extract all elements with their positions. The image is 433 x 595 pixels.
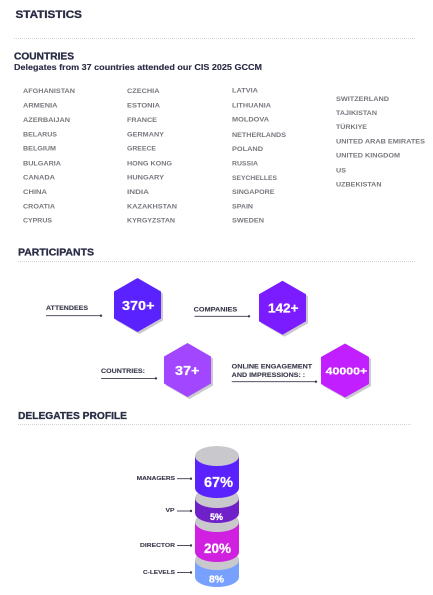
country column 1: ARMENIA (23, 102, 58, 110)
stat: companies: 142+ (268, 302, 298, 316)
stat: attendees: ATTENDEES (46, 305, 88, 312)
country column 4: UNITED KINGDOM (336, 153, 400, 160)
country column 3: SPAIN (232, 204, 253, 211)
segment: managers (137, 446, 239, 498)
country column 1: BULGARIA (23, 161, 61, 168)
stat: attendees (46, 278, 163, 334)
country column 2: INDIA (127, 189, 149, 196)
country column 3: LITHUANIA (232, 103, 271, 110)
country column 1: CHINA (23, 189, 47, 196)
segment: director: 20% (204, 541, 231, 556)
country column 3: MOLDOVA (232, 116, 269, 123)
country column 2: HONG KONG (127, 161, 172, 168)
stat: online engagement (232, 344, 371, 400)
country column 4 (336, 96, 426, 189)
segment: vp: VP (166, 508, 175, 514)
country column 2: HUNGARY (127, 175, 165, 182)
stat: online engagement: 40000+ (326, 366, 367, 378)
stat: companies (194, 281, 308, 337)
country column 3: POLAND (232, 146, 263, 153)
stat: countries (101, 343, 213, 399)
country column 3: LATVIA (232, 88, 258, 95)
segment: director: DIRECTOR (140, 543, 175, 549)
country column 4: US (336, 168, 347, 175)
country column 2: GREECE (127, 146, 157, 153)
subheading: delegates: Delegates from 37 countries attended our CIS 2025 GCCM (14, 63, 262, 72)
panel: participants (46, 278, 371, 400)
country column 1: BELARUS (23, 132, 58, 139)
segment: vp (166, 488, 239, 523)
country column 3 (232, 88, 287, 225)
country column 4: UZBEKISTAN (336, 182, 382, 189)
stat: attendees: 370+ (122, 299, 154, 313)
country column 3: SWEDEN (232, 218, 264, 225)
heading: delegates profile: DELEGATES PROFILE (18, 410, 127, 422)
stat: countries: COUNTRIES: (101, 368, 145, 375)
country column 2: GERMANY (127, 132, 165, 139)
stat: countries: 37+ (175, 364, 200, 378)
stat: companies: COMPANIES (194, 306, 237, 314)
country column 3: NETHERLANDS (232, 132, 287, 139)
stat: online engagement: ONLINE ENGAGEMENT (232, 364, 312, 371)
country column 4: SWITZERLAND (336, 96, 389, 103)
segment: c-levels: 8% (209, 575, 224, 586)
country column 1: CYPRUS (23, 218, 53, 225)
panel: country list (23, 88, 426, 225)
country column 4: TAJIKISTAN (336, 110, 377, 117)
country column 1: AFGHANISTAN (23, 88, 75, 95)
country column 1: AZERBAIJAN (23, 117, 70, 124)
segment: vp: 5% (210, 512, 223, 522)
title: STATISTICS (16, 9, 82, 21)
country column 3: RUSSIA (232, 161, 258, 168)
country column 3: SEYCHELLES (232, 175, 278, 182)
country column 4: TÜRKIYE (336, 122, 368, 131)
segment: managers: MANAGERS (137, 476, 175, 482)
country column 1: CROATIA (23, 204, 55, 211)
country column 1: BELGIUM (23, 146, 56, 153)
country column 1: CANADA (23, 175, 55, 182)
segment: managers: 67% (204, 474, 233, 491)
country column 2 (127, 88, 177, 225)
country column 4: UNITED ARAB EMIRATES (336, 139, 426, 146)
country column 2: FRANCE (127, 117, 158, 124)
segment: director (140, 512, 239, 562)
country column 1 (23, 88, 75, 225)
heading: participants: PARTICIPANTS (18, 246, 94, 258)
heading: countries: COUNTRIES (14, 52, 74, 62)
country column 2: KYRGYZSTAN (127, 218, 175, 225)
country column 3: SINGAPORE (232, 189, 275, 196)
segment: c-levels (143, 550, 239, 587)
stat: online engagement: AND IMPRESSIONS: : (232, 372, 305, 379)
segment: c-levels: C-LEVELS (143, 570, 175, 576)
country column 2: ESTONIA (127, 102, 160, 110)
country column 2: CZECHIA (127, 88, 160, 95)
country column 2: KAZAKHSTAN (127, 204, 177, 211)
chart: delegates profile cylinder stack (137, 446, 239, 587)
